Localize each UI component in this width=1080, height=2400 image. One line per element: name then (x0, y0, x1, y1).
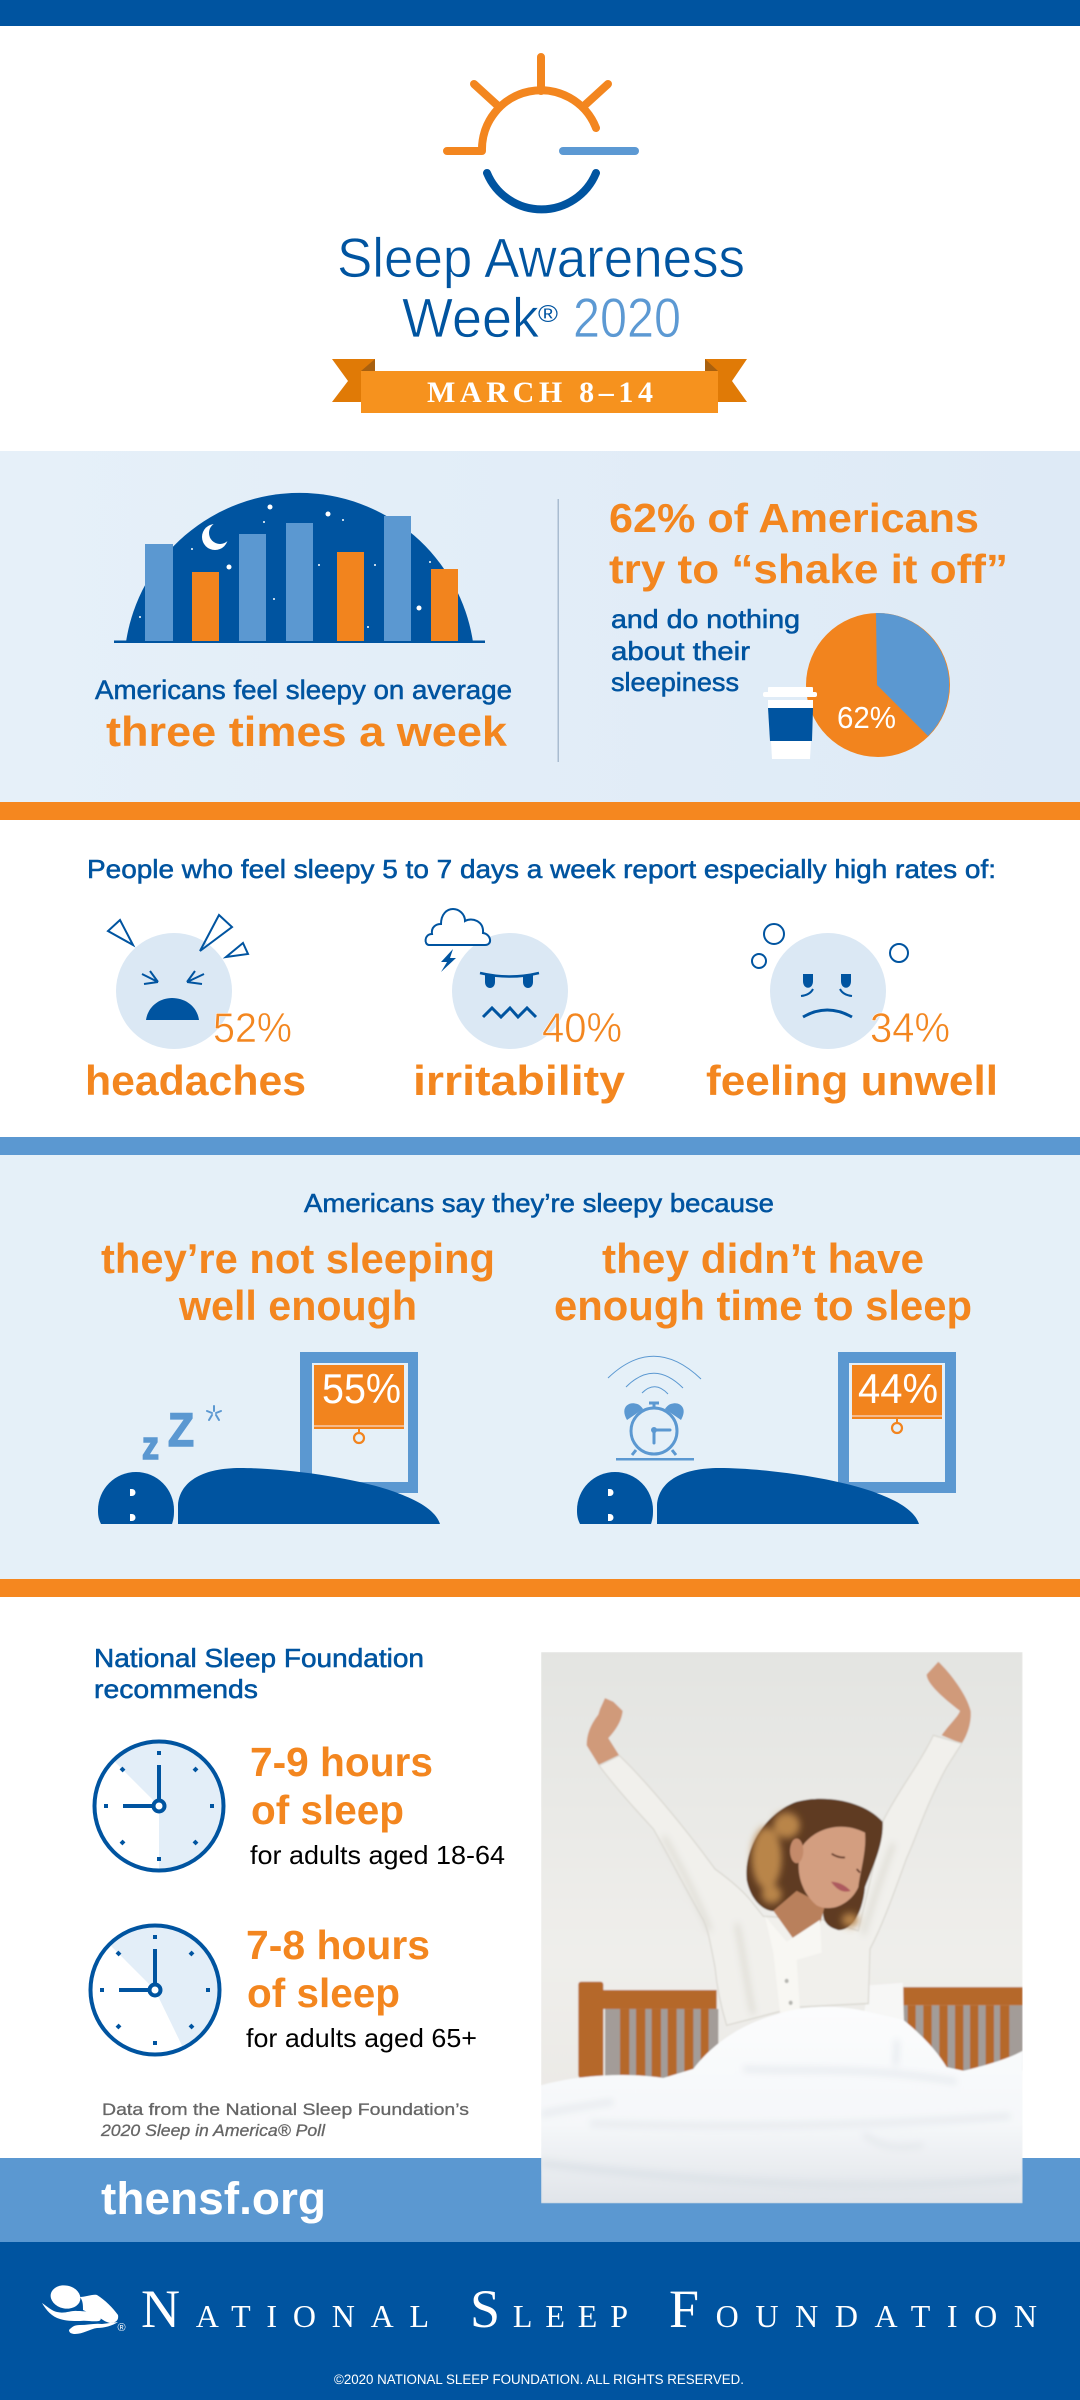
text: data source: 2020 Sleep in America® Poll (100, 2121, 326, 2140)
text: website: thensf.org (101, 2173, 326, 2224)
text: seven to eight hours: for adults aged 65+ (246, 2023, 477, 2053)
ribbon with dates: MARCH 8–14 (427, 376, 653, 409)
icon: irritable face (426, 909, 568, 1049)
icon: unwell face (752, 924, 908, 1049)
icon: zzz: z (142, 1424, 159, 1468)
icon: sleeping figure two (577, 1468, 919, 1524)
text: 62 percent headline: try to “shake it off” (609, 546, 1008, 592)
stat: 34 percent: 34% (870, 1004, 950, 1051)
text: not enough time: they didn’t have (602, 1235, 924, 1282)
panel: recommendations (90, 1643, 505, 2140)
text: 62 percent headline (609, 495, 1008, 592)
heading: say sleepy because: Americans say they’re sleepy because (304, 1188, 774, 1218)
text: data source (100, 2100, 469, 2140)
text: foundation wordmark: N ATIONAL (141, 2279, 429, 2339)
label: feeling unwell: feeling unwell (706, 1057, 998, 1104)
pie chart: 62 percent: 62% (837, 700, 896, 735)
icon: foundation sleeper logo (42, 2283, 126, 2334)
heading: foundation recommends: National Sleep Foundation (94, 1643, 424, 1673)
text: not enough time (554, 1235, 972, 1329)
icon: sun logo (447, 57, 635, 209)
text: seven to nine hours: for adults aged 18-64 (250, 1840, 505, 1870)
text: do nothing: about their (611, 636, 750, 666)
text: not enough time: enough time to sleep (554, 1282, 972, 1329)
text: data source: Data from the National Sleep Foundation’s (102, 2100, 469, 2119)
text: foundation wordmark: S LEEP (470, 2279, 628, 2339)
text: not sleeping well enough: well enough (178, 1282, 417, 1329)
heading: high rates: People who feel sleepy 5 to 7 days a week report especially high rates of: (87, 854, 996, 884)
text: foundation wordmark: F OUNDATION (669, 2279, 1037, 2339)
header: logo and title (332, 57, 747, 413)
icon: clock 7.5 hours (94, 1742, 224, 1870)
stat: 40 percent: 40% (542, 1004, 622, 1051)
title: Sleep Awareness (337, 226, 745, 289)
icon: zzz: Z (168, 1403, 194, 1456)
panel: symptoms (85, 854, 998, 1104)
heading: foundation recommends (94, 1643, 424, 1704)
ribbon with dates (332, 359, 747, 413)
icon: window with shade 44 percent (838, 1352, 956, 1493)
text: seven to nine hours: 7-9 hours (250, 1739, 433, 1785)
text: sleepy on average: Americans feel sleepy on average (95, 675, 512, 705)
top bar (0, 0, 1080, 26)
text: do nothing: sleepiness (611, 667, 739, 697)
text: not sleeping well enough: they’re not sleeping (101, 1235, 495, 1282)
label: headaches: headaches (85, 1057, 306, 1104)
icon: headache face (108, 915, 248, 1049)
website band (0, 2158, 1080, 2242)
label: irritability: irritability (413, 1057, 626, 1104)
title: ® (538, 301, 558, 328)
icon: sleeping figure one (98, 1468, 440, 1524)
text: copyright: ©2020 NATIONAL SLEEP FOUNDATION. ALL RIGHTS RESERVED. (334, 2372, 744, 2387)
icon: alarm clock (608, 1356, 701, 1460)
photo: woman stretching in bed (541, 1652, 1023, 2203)
text: three times a week: three times a week (106, 708, 508, 755)
text: seven to nine hours: of sleep (251, 1787, 404, 1833)
text: foundation wordmark (141, 2279, 1037, 2339)
pie chart: 62 percent (806, 613, 950, 757)
icon: coffee cup (763, 687, 817, 759)
icon: zzz (142, 1403, 221, 1468)
text: seven to nine hours (250, 1739, 505, 1870)
text: seven to eight hours: of sleep (247, 1970, 400, 2016)
stat: 52 percent: 52% (213, 1004, 292, 1051)
text: seven to eight hours (246, 1922, 477, 2053)
icon: window with shade 44 percent: 44% (858, 1365, 938, 1412)
bar chart: night dome with weekly bars (114, 493, 485, 643)
footer band (0, 2242, 1080, 2400)
title: Week (402, 286, 540, 349)
heading: foundation recommends: recommends (94, 1674, 258, 1704)
icon: window with shade 55 percent: 55% (322, 1365, 401, 1412)
panel: sleepiness frequency and response (0, 451, 1080, 802)
icon: foundation sleeper logo: ® (118, 2322, 126, 2334)
text: do nothing: and do nothing (611, 604, 800, 634)
panel: reasons for sleepiness (0, 1155, 1080, 1579)
title: 2020 (573, 286, 681, 349)
title (337, 226, 745, 349)
icon: window with shade 55 percent (300, 1352, 418, 1493)
icon: clock 6.5 hours (90, 1926, 220, 2054)
text: do nothing (611, 604, 800, 697)
text: seven to eight hours: 7-8 hours (246, 1922, 430, 1968)
text: not sleeping well enough (101, 1235, 495, 1329)
text: 62 percent headline: 62% of Americans (609, 495, 979, 541)
